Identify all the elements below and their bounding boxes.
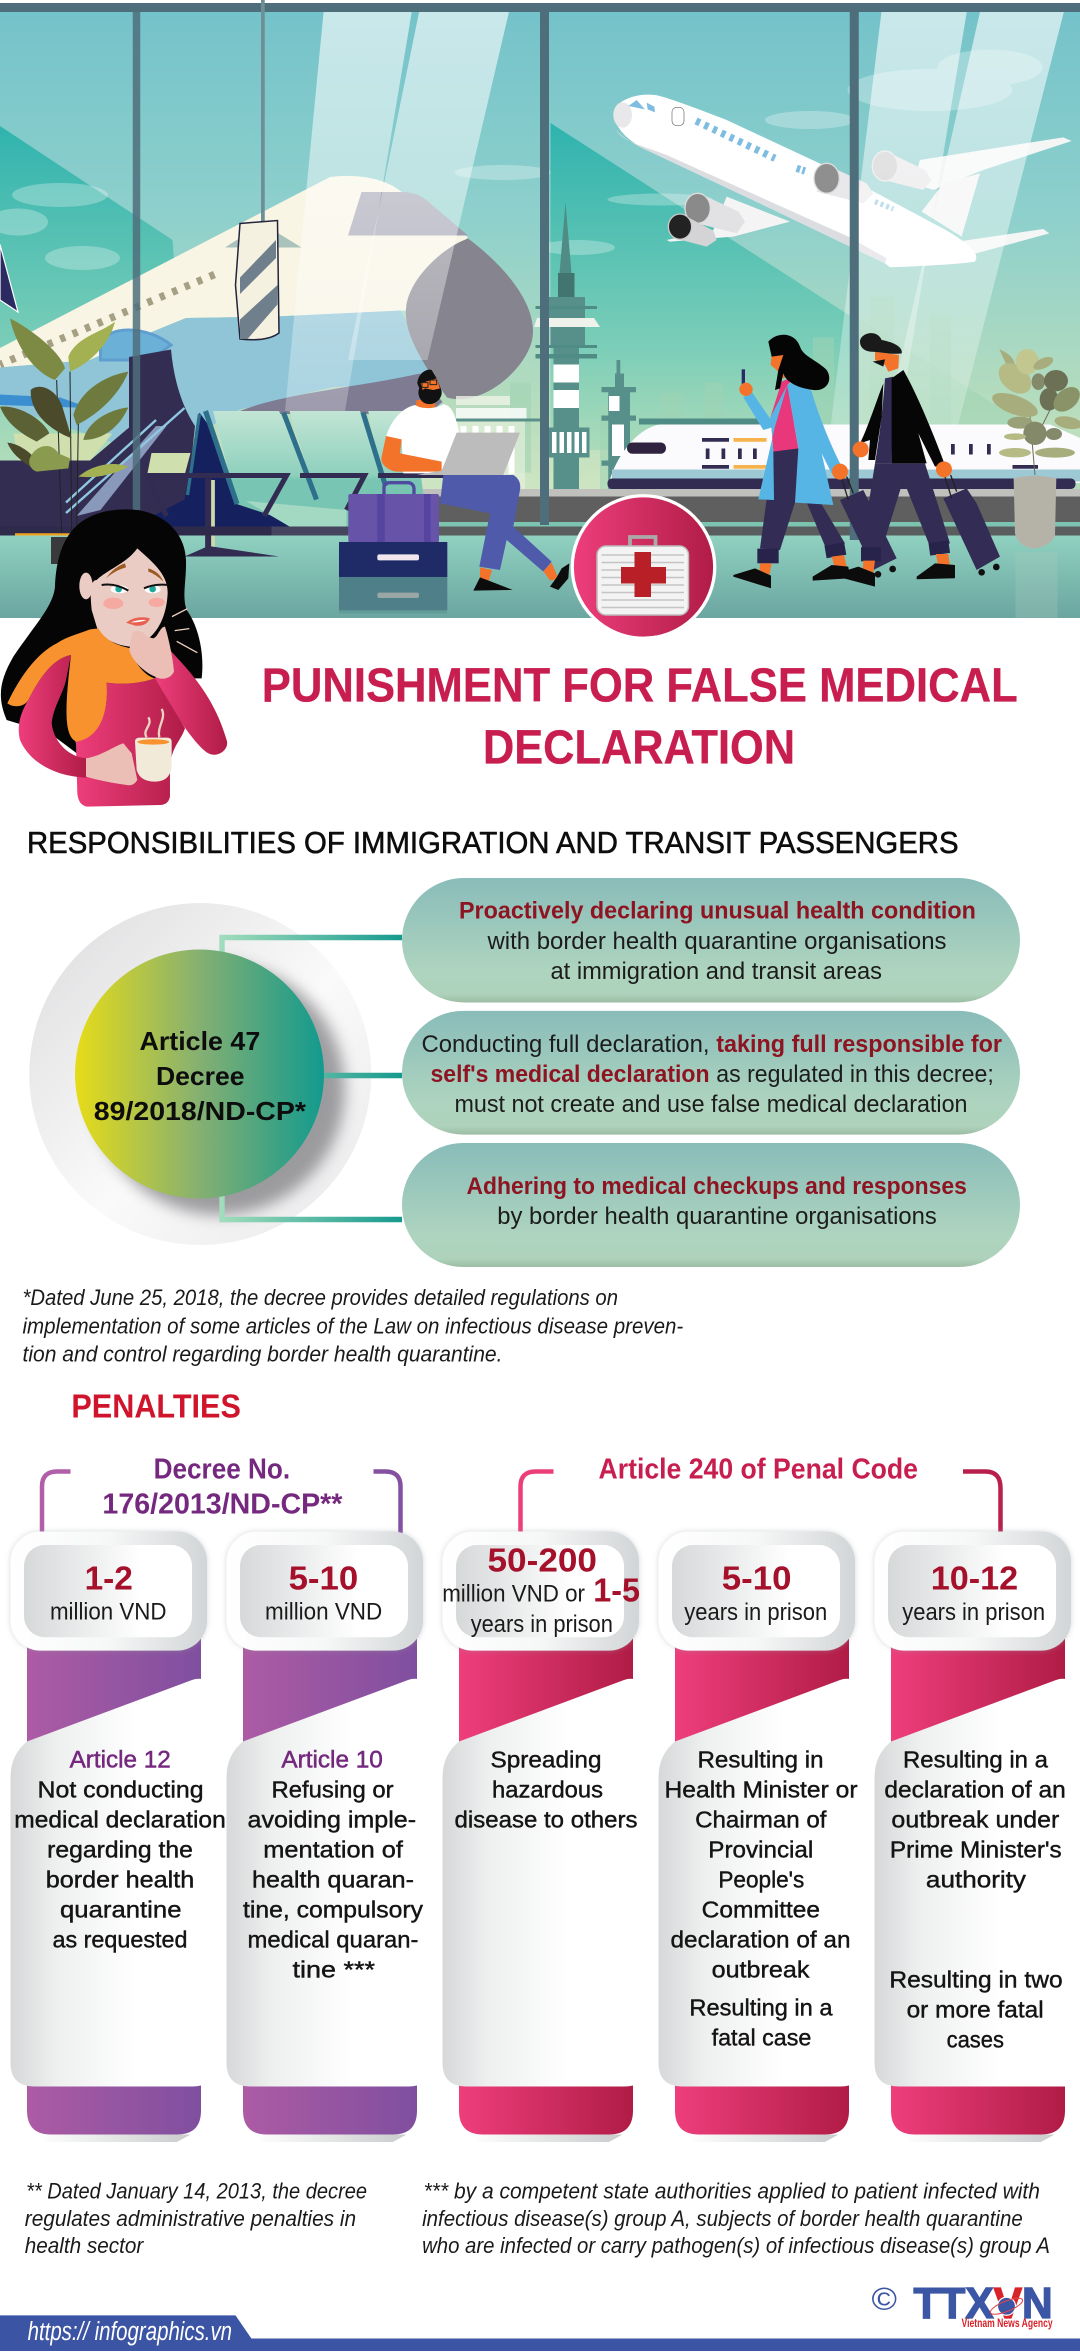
fuselage (613, 95, 976, 267)
cockpit windows (628, 100, 655, 112)
penalty column 1: Not conducting (38, 1777, 204, 1803)
face (771, 353, 795, 378)
penalty column 5: 10-12 (931, 1559, 1018, 1596)
responsibility pill 1: Proactively declaring unusual health condition (459, 898, 976, 925)
leaves (989, 349, 1080, 458)
white body (442, 1679, 648, 2086)
penalty column 1: as requested (52, 1927, 188, 1953)
ribbon (243, 1636, 417, 2134)
decree 176 heading with bracket: 176/2013/ND-CP** (102, 1488, 343, 1520)
penalty column 1: regarding the (47, 1837, 193, 1863)
ground shadow (686, 2134, 838, 2142)
penalty column 4: fatal case (712, 2025, 811, 2051)
ground shadow (254, 2134, 406, 2142)
body text: Resulting in a (903, 1747, 1048, 1773)
lower hand (86, 743, 137, 785)
raised hand (129, 627, 174, 679)
penalty column 5: Prime Minister's (890, 1837, 1062, 1863)
pale ground patch (14, 434, 112, 460)
body text: Article 12 (70, 1747, 171, 1774)
sick woman with cup (1, 509, 227, 807)
jacket (875, 377, 893, 463)
purple bag (348, 494, 439, 542)
seated man with laptop (381, 370, 569, 591)
hanging lamp (225, 0, 302, 340)
amount tag inner (240, 1545, 408, 1637)
suitcase (840, 490, 897, 570)
penalty column 4: years in prison (684, 1599, 827, 1626)
hair (768, 335, 829, 390)
gradient ball (75, 950, 324, 1198)
cup (135, 738, 172, 782)
penalty column 2: mentation of (263, 1837, 403, 1863)
pot (51, 537, 72, 564)
penalty column 2: health quaran- (252, 1867, 414, 1893)
penalty column 4: Committee (702, 1897, 820, 1923)
ribbon (27, 1636, 201, 2134)
cheeks (103, 598, 123, 609)
door (672, 107, 684, 126)
stairs (76, 426, 166, 516)
penalty column 3: 50-200 (488, 1541, 597, 1578)
penalty column 5: years in prison (902, 1599, 1045, 1626)
laptop (417, 433, 520, 475)
right potted plant (989, 349, 1080, 548)
neck (415, 400, 435, 412)
ground shadow (902, 2134, 1054, 2142)
responsibility pill 2: as regulated in this decree; (716, 1061, 994, 1088)
decree 176 heading with bracket: Decree No. (154, 1453, 290, 1485)
shoes (473, 563, 569, 591)
penalty column 5: or more fatal (907, 1996, 1044, 2022)
red cross (621, 552, 666, 597)
leaves (10, 318, 65, 380)
inner shadow (93, 963, 345, 1215)
ground shadow (470, 2134, 622, 2142)
pedestal (206, 478, 211, 550)
amount tag outer (442, 1532, 639, 1651)
tail fin at edge (0, 244, 18, 312)
responsibility pill 1: at immigration and transit areas (550, 958, 882, 985)
penalty column 5 (874, 1532, 1080, 2142)
penalty column 2: 5-10 (289, 1559, 358, 1596)
decree 176 heading with bracket (42, 1453, 400, 1534)
ribbon (675, 1636, 849, 2134)
amount tag inner (456, 1545, 624, 1637)
light beams (285, 8, 1065, 435)
badge circle (572, 496, 715, 638)
ear (79, 573, 93, 599)
footnote: competent authorities: infectious disease(s) group A, subjects of border health quarantine (422, 2206, 1023, 2231)
penalty column 2: million VND (265, 1598, 382, 1625)
phone and hands (742, 369, 745, 387)
floor reflections (339, 552, 1058, 618)
handle (384, 483, 414, 495)
penalty column 5: authority (926, 1867, 1026, 1893)
hair (1, 509, 202, 753)
white body (658, 1679, 864, 2086)
face (91, 548, 168, 647)
window frames (0, 3, 1080, 540)
penalty column 4: Chairman of (695, 1807, 827, 1833)
penalty column 2: tine, compulsory (243, 1897, 423, 1923)
bullet train (608, 418, 1080, 489)
penalty column 1: million VND (50, 1598, 167, 1625)
seat backs (213, 411, 346, 526)
footnote: decree 89: *Dated June 25, 2018, the decree provides detailed regulations on (22, 1285, 618, 1310)
agency logo (872, 2280, 1053, 2330)
right arm (155, 650, 227, 755)
penalty column 5: Resulting in two (889, 1966, 1063, 1992)
penalty column 2: Refusing or (272, 1777, 394, 1803)
train body (609, 424, 1080, 483)
navy block (0, 350, 195, 526)
big parked airplane (0, 176, 533, 450)
armrest bars (147, 476, 450, 516)
responsibility pill 3: by border health quarantine organisations (497, 1203, 937, 1230)
head and beard (417, 370, 442, 404)
clouds (0, 50, 1042, 270)
small airplane taking off (613, 95, 1072, 267)
blue stripe (0, 394, 78, 408)
penalty column 3: million VND or (442, 1580, 585, 1607)
article 240 heading with bracket: Article 240 of Penal Code (598, 1453, 918, 1485)
footnote: decree 176 (25, 2178, 367, 2258)
penalty column 4: People's (718, 1867, 804, 1893)
penalty column 1: 1-2 (85, 1559, 133, 1596)
trousers (440, 475, 552, 572)
luggage stack (339, 483, 447, 610)
belly shadow (240, 374, 442, 414)
penalty column 4: 5-10 (722, 1559, 792, 1596)
nose cone (613, 102, 632, 128)
responsibility pill 2: self's medical declaration (430, 1061, 710, 1088)
footnote: decree 89: implementation of some articles of the Law on infectious disease preven- (22, 1314, 683, 1339)
amount tag outer (10, 1532, 207, 1651)
windshield (627, 442, 666, 454)
amount tag outer (226, 1532, 423, 1651)
ball text (94, 1026, 307, 1126)
amount tag inner (24, 1545, 192, 1637)
connectors (222, 938, 402, 1220)
responsibility pill 2: Conducting full declaration, (422, 1031, 710, 1058)
tail (962, 229, 1050, 254)
penalty column 2: tine *** (292, 1957, 375, 1983)
responsibility pill 2: taking full responsible for (716, 1031, 1002, 1058)
penalty column 1: quarantine (60, 1897, 182, 1923)
white body (10, 1679, 216, 2086)
footnote: decree 176: regulates administrative penalties in (25, 2206, 356, 2231)
responsibility pill 2: must not create and use false medical declaration (454, 1091, 968, 1118)
hero airport illustration (0, 0, 1080, 620)
responsibility pill 1 (402, 878, 1020, 1002)
sweater body (75, 678, 185, 807)
second small tower (602, 360, 636, 498)
arm (381, 436, 442, 472)
footer bar with url (0, 2315, 1080, 2351)
penalty column 3: 1-5 (593, 1571, 640, 1608)
engine 3 (700, 196, 745, 234)
engine 4 (681, 218, 717, 247)
kit case (597, 546, 688, 615)
penalty column 2: medical quaran- (248, 1927, 418, 1953)
responsibility pill 3: Adhering to medical checkups and responses (466, 1173, 967, 1200)
ribbon (891, 1636, 1065, 2134)
white body (874, 1679, 1080, 2086)
ribbon (459, 1636, 633, 2134)
title (262, 659, 1018, 774)
bridge arc (100, 330, 171, 360)
penalty column 1: medical declaration (14, 1807, 226, 1833)
penalty column 4: declaration of an (670, 1927, 850, 1953)
cough lines (172, 609, 197, 653)
belly blue (0, 310, 432, 450)
base band segment (272, 526, 348, 536)
penalty column 1 (10, 1532, 226, 2142)
coat sleeve (743, 392, 780, 430)
suitcase (943, 488, 1000, 570)
white body (226, 1679, 432, 2086)
control tower (534, 202, 600, 498)
globe emblem (989, 2295, 1024, 2317)
amount tag inner (888, 1545, 1056, 1637)
lower right glass tint (859, 385, 1080, 489)
face and hair (875, 352, 899, 372)
trousers (862, 463, 950, 550)
brows (106, 563, 163, 582)
ball text: Decree (156, 1061, 244, 1091)
dark back frame (150, 412, 294, 526)
ground shadow (38, 2134, 190, 2142)
cabin windows (0, 274, 214, 364)
penalty column 4: Resulting in a (689, 1995, 833, 2021)
footnote: competent authorities (422, 2178, 1050, 2258)
wordmark: TTXVN (914, 2280, 1053, 2328)
amount tag inner (672, 1545, 840, 1637)
trousers (760, 448, 845, 550)
distant city buildings (510, 338, 834, 489)
penalty column 3: hazardous (492, 1777, 603, 1803)
stems (57, 372, 78, 533)
stem (1030, 403, 1053, 475)
ankles and shoes (759, 555, 847, 575)
penalties heading: PENALTIES (71, 1387, 241, 1425)
hands (853, 441, 869, 457)
body text: Spreading (490, 1747, 602, 1773)
penalty column 5: outbreak under (891, 1807, 1060, 1833)
ball text: 89/2018/ND-CP* (94, 1096, 307, 1126)
far wing (913, 137, 1072, 190)
ankles and shoes (863, 554, 950, 573)
right pale wall (147, 453, 190, 476)
penalty column 3: disease to others (454, 1807, 638, 1833)
reflected diagonal teal glass (0, 123, 850, 460)
responsibilities heading: RESPONSIBILITIES OF IMMIGRATION AND TRANSIT PASSENGERS (27, 825, 958, 860)
windows (696, 121, 775, 158)
background terminal building (456, 396, 540, 496)
navy case (339, 542, 447, 577)
amount tag outer (658, 1532, 855, 1651)
penalty column 5: cases (947, 2026, 1004, 2052)
fin (922, 173, 980, 237)
body text: Article 10 (281, 1747, 383, 1774)
cockpit (348, 192, 468, 236)
footer bar with url: https:// infographics.vn (28, 2318, 232, 2346)
seat dividers (206, 411, 386, 504)
stripes and windows (702, 438, 1038, 469)
nose (406, 238, 533, 399)
near wing (667, 197, 790, 242)
penalty column 4: Health Minister or (664, 1777, 858, 1803)
amount tag outer (874, 1532, 1071, 1651)
penalty column 4: outbreak (712, 1957, 810, 1983)
responsibility pill 2 (402, 1011, 1020, 1135)
fuselage (0, 176, 468, 368)
steam (145, 709, 163, 737)
lips (126, 617, 150, 626)
title: DECLARATION (483, 722, 795, 775)
title: PUNISHMENT FOR FALSE MEDICAL (262, 659, 1018, 712)
left arm (19, 655, 87, 778)
white shirt (386, 404, 460, 473)
footnote: decree 176: health sector (25, 2233, 145, 2258)
reflection (339, 577, 447, 610)
dark jet bridge and stairs (0, 330, 195, 526)
coat right panel (787, 378, 842, 505)
kit handle (630, 537, 656, 548)
roof rail (639, 418, 760, 424)
responsibility pill 3 (402, 1143, 1020, 1267)
belly band (616, 130, 887, 263)
ankles (480, 563, 558, 582)
penalty column 2: avoiding imple- (248, 1807, 416, 1833)
penalty column 4: Provincial (708, 1837, 813, 1863)
ball text: Article 47 (140, 1026, 260, 1056)
copyright mark: © (872, 2281, 897, 2317)
walking man with suitcase (837, 333, 1000, 587)
engine 1 (816, 170, 873, 204)
footnote: decree 89 (22, 1285, 683, 1367)
footnote: competent authorities: *** by a competent state authorities applied to patient infected with (424, 2178, 1040, 2203)
shiny floor (0, 536, 1080, 620)
body text: Resulting in (698, 1747, 824, 1773)
penalty column 5: declaration of an (884, 1777, 1066, 1803)
penalty column 1: border health (46, 1867, 194, 1893)
penalty column 3: years in prison (471, 1611, 613, 1638)
footnote: decree 89: tion and control regarding border health quarantine. (22, 1342, 502, 1367)
footnote: decree 176: ** Dated January 14, 2013, the decree (26, 2178, 367, 2203)
pot (1014, 476, 1056, 548)
pink top (771, 373, 800, 452)
responsibility pill 1: with border health quarantine organisations (487, 928, 947, 955)
medical kit badge (572, 496, 715, 638)
walking woman with suitcase (733, 335, 897, 588)
waiting chairs (0, 411, 450, 556)
article 240 heading with bracket (520, 1453, 1000, 1532)
left potted plant (0, 318, 128, 564)
outer halo (29, 903, 371, 1245)
platform bands (422, 489, 1080, 496)
scarf (7, 628, 155, 742)
article 47 circle diagram (29, 903, 402, 1245)
penalty column 4 (658, 1532, 864, 2142)
penalty column 3 (442, 1532, 648, 2142)
engine 2 (877, 152, 932, 190)
coat left panel (758, 385, 787, 500)
penalty column 2 (226, 1532, 432, 2142)
sky and window glass (0, 3, 1080, 536)
eyes (111, 585, 128, 593)
seat cushions (246, 501, 346, 526)
